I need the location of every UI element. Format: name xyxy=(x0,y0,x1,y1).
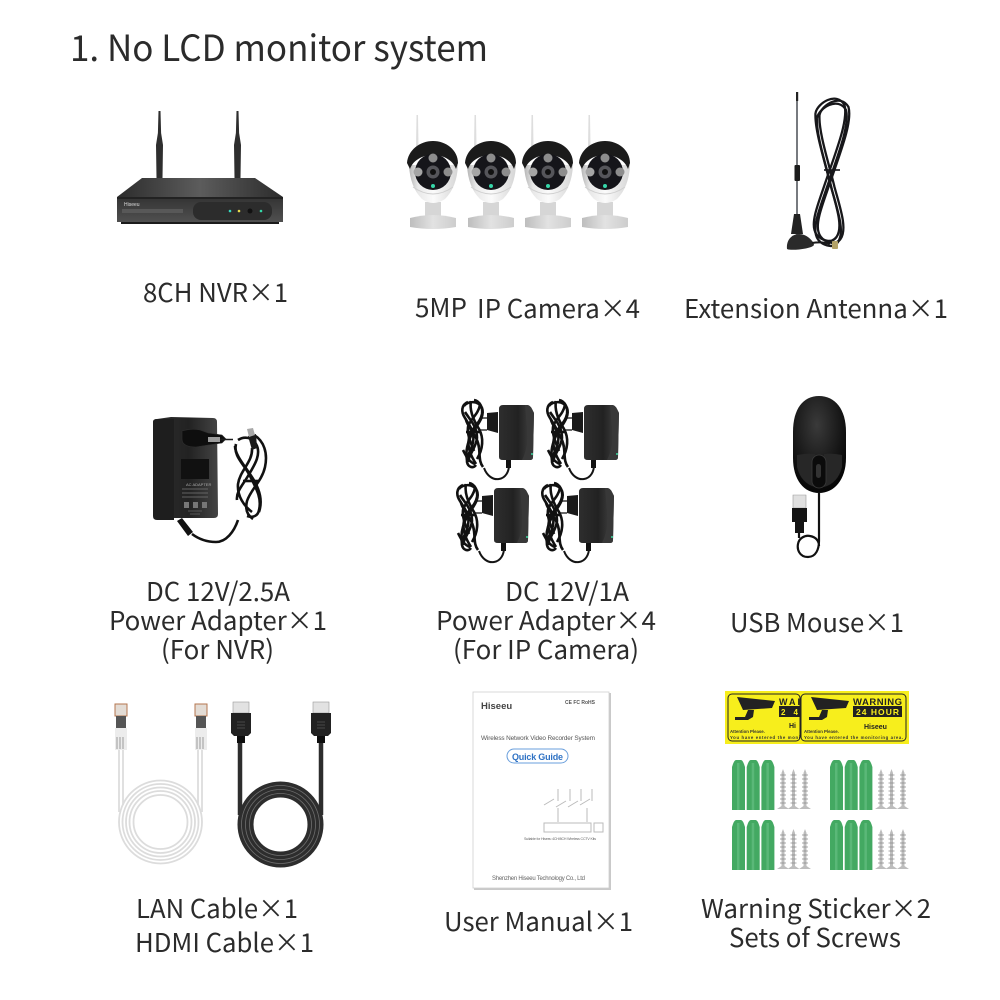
icon: warning stickers: Hi xyxy=(789,723,796,730)
icon: white LAN cable xyxy=(115,704,207,864)
label: NVR: 8CH NVR×1 xyxy=(143,273,288,310)
label: stickers and screws xyxy=(701,889,931,955)
icon: warning stickers: Hiseeu xyxy=(864,724,887,731)
label: 12V 2.5A adapter: (For NVR) xyxy=(161,630,274,667)
item: extension antenna xyxy=(684,92,948,326)
icon: wall anchors and screws xyxy=(732,760,909,870)
item: stickers and screws xyxy=(701,691,931,955)
item: LAN and HDMI cables xyxy=(115,702,331,960)
label: 12V 1A adapters: (For IP Camera) xyxy=(453,630,639,667)
icon: 12V 2.5A adapter xyxy=(153,417,266,542)
label: 12V 1A adapters: DC 12V/1A xyxy=(505,572,629,609)
label: cameras: 5MP xyxy=(415,288,467,325)
label: antenna: Extension Antenna×1 xyxy=(684,289,948,326)
icon: warning stickers: Attention Please. xyxy=(804,729,839,734)
icon: warning stickers: You have entered the moni xyxy=(730,735,800,740)
item: IP cameras xyxy=(407,115,640,326)
icon: magnetic antenna and cable xyxy=(787,92,849,250)
icon: quick guide booklet: CE FC RoHS xyxy=(565,700,596,706)
label: cables xyxy=(135,889,314,960)
icon: warning stickers xyxy=(725,691,909,744)
label: stickers and screws: Sets of Screws xyxy=(729,918,901,955)
icon: quick guide booklet xyxy=(473,692,611,890)
label: cameras: IP Camera×4 xyxy=(477,289,640,326)
title: 1. No LCD monitor system xyxy=(70,20,488,72)
icon: quick guide booklet: Quick Guide xyxy=(512,752,563,762)
icon: mouse with cable xyxy=(792,396,846,557)
item: USB mouse xyxy=(730,396,904,640)
icon: 12V 2.5A adapter: AC ADAPTER xyxy=(186,482,211,487)
item: camera power adapters xyxy=(436,400,656,667)
label: 12V 2.5A adapter: Power Adapter×1 xyxy=(109,601,327,638)
icon: NVR antennas xyxy=(156,111,241,178)
label: 12V 2.5A adapter xyxy=(109,572,327,667)
item: NVR power adapter xyxy=(109,417,327,667)
icon: warning stickers: You have entered the monitoring area. xyxy=(804,735,903,740)
icon: black HDMI cable xyxy=(231,702,331,864)
icon: quick guide booklet: Shenzhen Hiseeu Technology Co., Ltd xyxy=(492,876,585,882)
icon: warning stickers: WAI xyxy=(779,697,800,707)
icon: four bullet cameras xyxy=(407,115,630,229)
item: user manual xyxy=(444,692,633,939)
icon: quick guide booklet: Hiseeu xyxy=(481,701,512,712)
item: NVR recorder xyxy=(117,111,288,310)
label: 12V 1A adapters xyxy=(436,572,656,667)
label: cables: HDMI Cable×1 xyxy=(135,923,314,960)
icon: quick guide booklet: Suitable for Hiseeu 4CH/8CH Wireless CCTV Kits xyxy=(524,837,596,841)
icon: NVR body: Hiseeu xyxy=(124,202,140,208)
label: manual: User Manual×1 xyxy=(444,902,633,939)
icon: warning stickers: 24 xyxy=(781,708,799,717)
label: cables: LAN Cable×1 xyxy=(136,889,298,926)
label: 12V 1A adapters: Power Adapter×4 xyxy=(436,601,656,638)
icon: NVR body xyxy=(117,178,283,224)
icon: warning stickers: 24 HOUR xyxy=(856,707,899,717)
icon: warning stickers: WARNING xyxy=(853,697,902,708)
label: 12V 2.5A adapter: DC 12V/2.5A xyxy=(146,572,290,609)
label: stickers and screws: Warning Sticker×2 xyxy=(701,889,931,926)
icon: quick guide booklet: Wireless Network Video Recorder System xyxy=(481,735,595,742)
icon: warning stickers: Attention Please. xyxy=(730,729,765,734)
label: mouse: USB Mouse×1 xyxy=(730,603,904,640)
icon: four 12V 1A adapters xyxy=(457,400,619,562)
